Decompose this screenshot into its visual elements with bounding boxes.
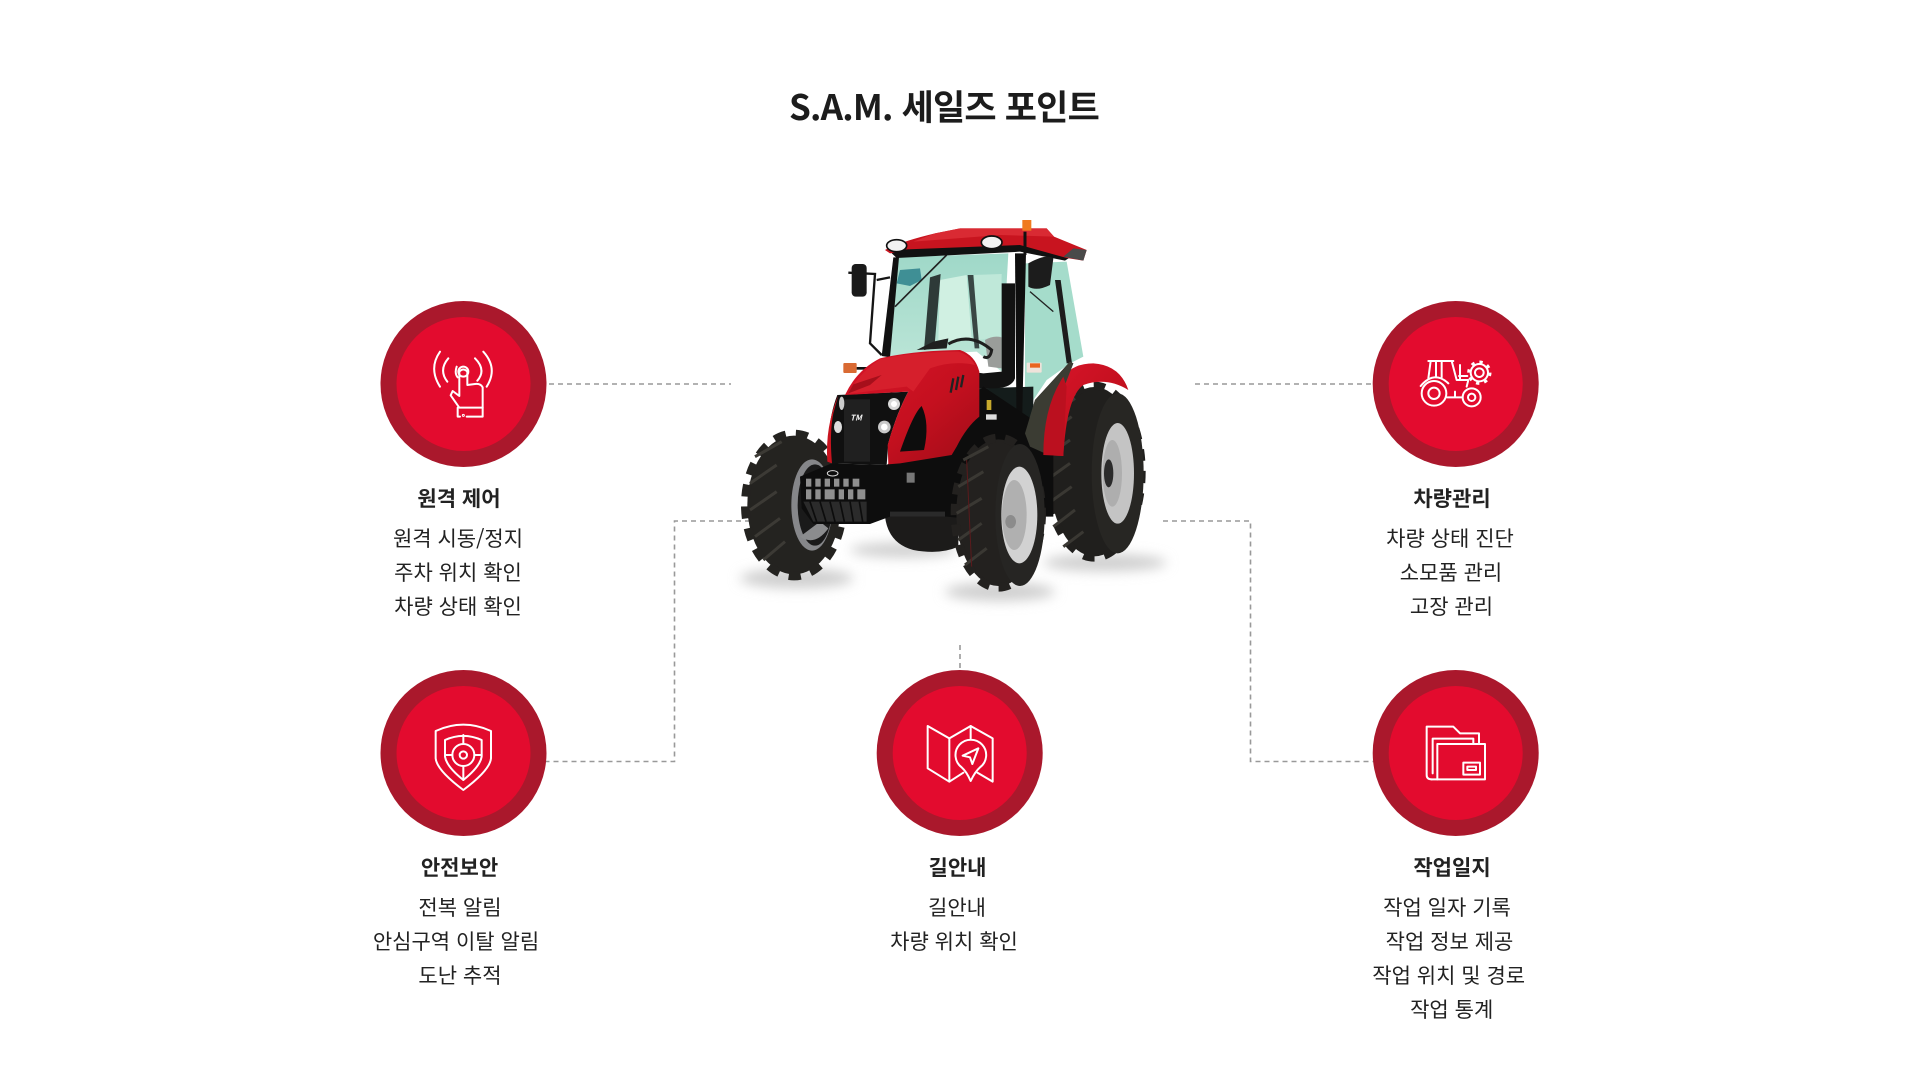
heading: 길안내 — [929, 852, 986, 882]
description: 작업 통계 — [1410, 994, 1493, 1024]
icon: folder — [1373, 670, 1539, 836]
rear wheel — [1047, 386, 1144, 558]
description — [373, 892, 539, 990]
mirrors — [848, 257, 1053, 355]
icon: map pin — [877, 670, 1043, 836]
feature: vehicle management — [1373, 301, 1539, 621]
tractor — [740, 220, 1167, 601]
description: 소모품 관리 — [1400, 557, 1502, 587]
feature: remote control — [380, 301, 546, 621]
icon: remote touch — [380, 301, 546, 467]
description: 작업 위치 및 경로 — [1372, 960, 1525, 990]
description: 차량 상태 확인 — [394, 591, 522, 621]
connector lines — [546, 384, 1376, 762]
description: 주차 위치 확인 — [394, 557, 522, 587]
description: 차량 위치 확인 — [890, 926, 1018, 956]
roof — [885, 220, 1087, 261]
description: 도난 추적 — [418, 960, 502, 990]
description: 길안내 — [928, 892, 986, 922]
cab glass — [882, 253, 1083, 400]
chassis — [800, 387, 1053, 524]
grille: TM — [850, 413, 863, 424]
counterweight — [803, 471, 867, 522]
feature: work log — [1372, 670, 1539, 1024]
feature: navigation — [877, 670, 1043, 956]
description — [1386, 523, 1514, 621]
lower cab — [978, 387, 1033, 443]
description — [890, 892, 1018, 956]
central pillar and intake pipe — [1015, 253, 1026, 440]
description: 원격 시동/정지 — [393, 523, 523, 553]
fender — [1043, 363, 1128, 456]
grille — [827, 392, 908, 465]
description — [393, 523, 523, 621]
icon: tractor and gear — [1373, 301, 1539, 467]
description: 차량 상태 진단 — [1386, 523, 1514, 553]
description: 고장 관리 — [1410, 591, 1493, 621]
feature: safety and security — [373, 670, 546, 990]
heading: 차량관리 — [1413, 483, 1491, 513]
hood — [845, 350, 979, 464]
description: 전복 알림 — [418, 892, 502, 922]
left front wheel — [745, 434, 843, 576]
description — [1372, 892, 1525, 1024]
description: 안심구역 이탈 알림 — [373, 926, 539, 956]
heading: 안전보안 — [421, 852, 498, 882]
heading: 원격 제어 — [417, 483, 501, 513]
icon: shield — [380, 670, 546, 836]
title: S.A.M. 세일즈 포인트 — [789, 80, 1099, 131]
far wheel — [885, 513, 958, 552]
description: 작업 정보 제공 — [1386, 926, 1513, 956]
near front wheel — [955, 438, 1045, 587]
description: 작업 일자 기록 — [1383, 892, 1511, 922]
heading: 작업일지 — [1413, 852, 1491, 882]
